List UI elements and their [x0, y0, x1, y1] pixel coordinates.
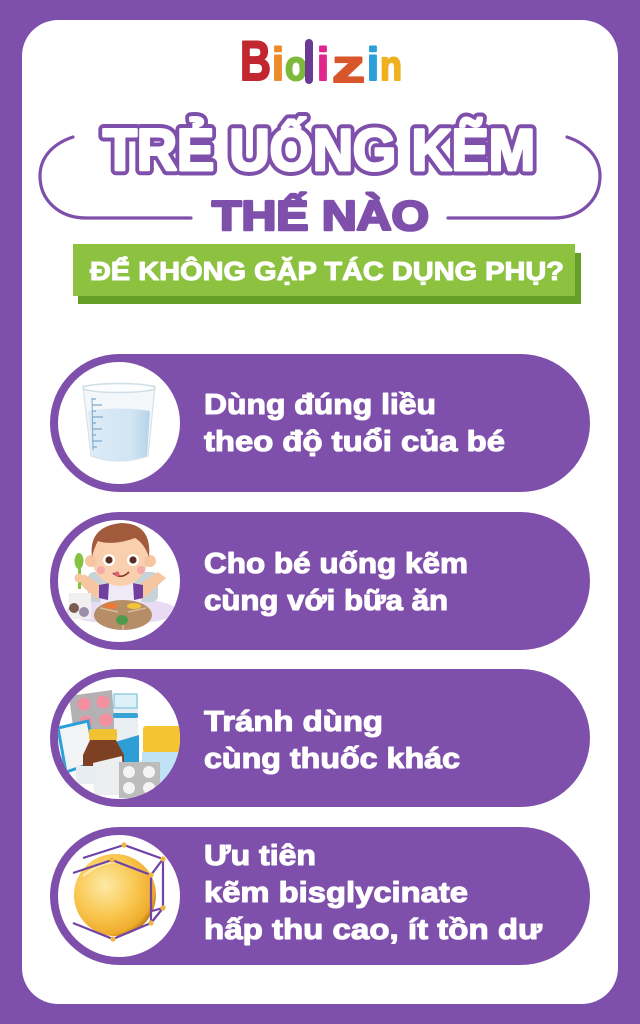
text: medicine: Tránh dùng — [204, 706, 383, 738]
logo: Biolizin: i — [367, 38, 379, 90]
text: bisglycinate — [204, 840, 542, 946]
title: TRẺ UỐNG KẼM: TRẺ UỐNG KẼM — [103, 118, 535, 183]
title bracket left — [40, 137, 191, 218]
logo: Biolizin: z — [332, 40, 365, 92]
text: medicine: cùng thuốc khác — [204, 743, 460, 775]
panel: correct dose — [50, 354, 590, 492]
logo: Biolizin — [240, 29, 402, 92]
icon: baby eating — [67, 523, 177, 630]
text: meals: cùng với bữa ăn — [204, 585, 448, 617]
text: bisglycinate: hấp thu cao, ít tồn dư — [204, 914, 542, 946]
text: meals — [204, 548, 468, 617]
subtitle: THẾ NÀO: THẾ NÀO — [212, 192, 429, 239]
panel: bisglycinate — [50, 827, 590, 965]
logo: Biolizin: n — [380, 42, 402, 89]
text: dose — [204, 389, 505, 458]
text: meals: Cho bé uống kẽm — [204, 548, 468, 580]
logo: Biolizin: i — [272, 38, 284, 90]
logo: Biolizin: o — [285, 42, 307, 89]
icon: measuring cup — [83, 384, 155, 461]
text: medicine — [204, 706, 460, 775]
logo: Biolizin: B — [240, 29, 271, 92]
icon: golden molecule — [73, 842, 166, 942]
banner text: ĐỂ KHÔNG GẶP TÁC DỤNG PHỤ? — [90, 256, 564, 286]
title bracket right — [448, 137, 600, 218]
panel: avoid other medicine — [50, 669, 590, 807]
text: dose: Dùng đúng liều — [204, 389, 436, 421]
panel: take with meals — [50, 512, 590, 650]
icon: medicines — [58, 690, 181, 798]
text: bisglycinate: kẽm bisglycinate — [204, 877, 468, 909]
text: dose: theo độ tuổi của bé — [204, 426, 505, 458]
text: bisglycinate: Ưu tiên — [204, 840, 316, 872]
title: TRẺ UỐNG KẼM: TRẺ UỐNG KẼM — [103, 118, 535, 183]
logo: Biolizin: i — [317, 38, 329, 90]
green banner — [73, 244, 581, 304]
